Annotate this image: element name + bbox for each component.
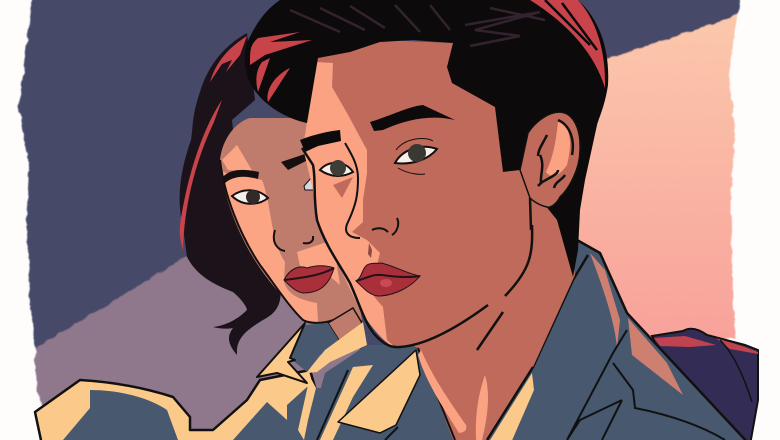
- figure: woman: [180, 33, 362, 355]
- figure: man's far shoulder: [652, 329, 758, 440]
- woman face: [220, 118, 362, 325]
- woman hair highlights: [210, 36, 247, 82]
- man hair strands: [545, 0, 597, 50]
- man neck: [400, 250, 573, 440]
- man hair: [245, 0, 608, 277]
- man face highlights: [303, 62, 395, 347]
- man ear: [520, 112, 580, 230]
- man jaw and face outline: [302, 148, 532, 350]
- woman neck: [328, 308, 362, 345]
- figure: woman's shirt: [35, 322, 367, 440]
- man head: [305, 40, 575, 367]
- man's shirt collar: [487, 373, 534, 440]
- man under-eye shadow: [333, 177, 353, 198]
- woman left eye: [222, 170, 268, 204]
- man left eye and brow: [300, 130, 353, 176]
- woman right eye and brow: [281, 154, 316, 190]
- man philtrum: [368, 243, 372, 258]
- woman hair: [180, 33, 281, 355]
- neck highlights: [418, 350, 488, 440]
- man hair streaks: [290, 5, 545, 46]
- woman nose and lips: [274, 230, 313, 251]
- figure: man: [245, 0, 750, 440]
- woman's collar: [298, 322, 367, 440]
- man nose: [345, 143, 398, 238]
- man hair highlights: [250, 32, 312, 65]
- man shirt lines: [317, 348, 455, 440]
- man lips: [356, 263, 420, 296]
- man right eye and brow: [370, 105, 455, 174]
- man jacket: [305, 345, 460, 440]
- jacket collar highlight: [590, 253, 683, 395]
